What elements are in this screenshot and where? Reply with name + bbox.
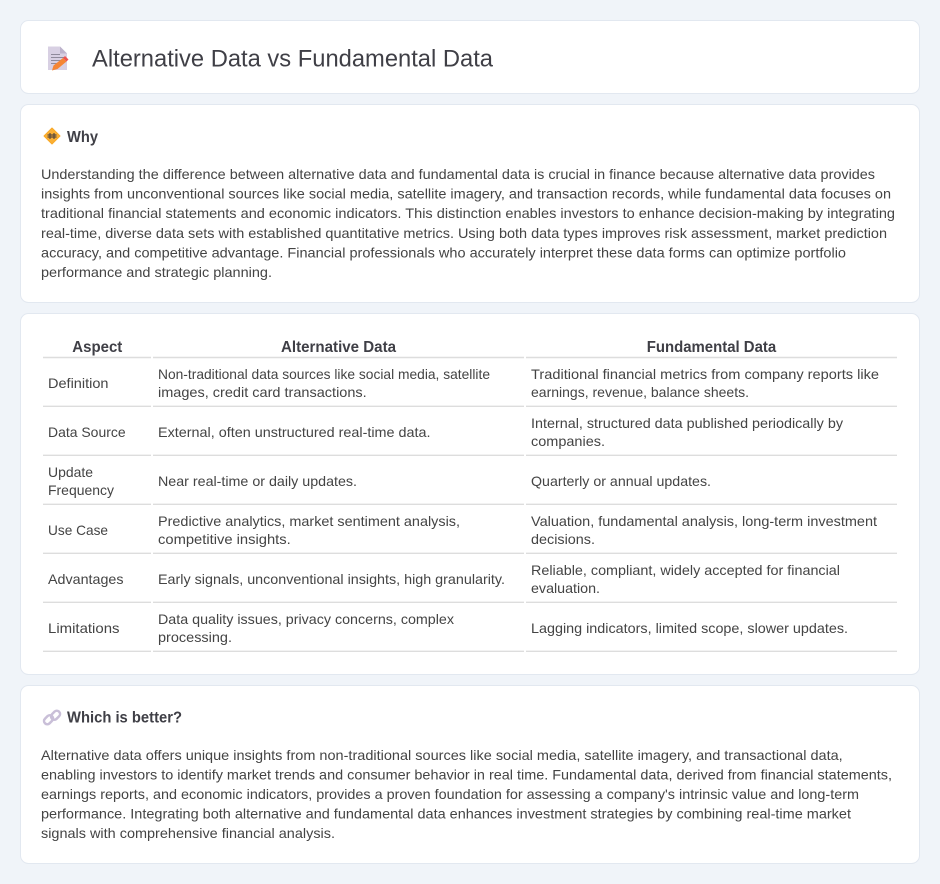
text block: why paragraph: insights from unconventional sources like social media, satellite imagery, and transaction records, while fundamental data focuses on [41,186,891,202]
text block: which is better paragraph: Alternative data offers unique insights from non-traditional sources like social media, satellite imagery, and transactional data, [41,747,843,763]
table row: update frequency: Quarterly or annual updates. [531,473,711,489]
table row: definition: images, credit card transactions. [158,384,367,400]
table row: advantages: Early signals, unconventional insights, high granularity. [158,571,505,587]
table row: use case [48,513,877,547]
table row: advantages: Reliable, compliant, widely accepted for financial [531,562,840,578]
table header row: Fundamental Data [647,339,776,356]
panel: comparison table [20,314,920,674]
table row: update frequency: Frequency [48,482,114,498]
text block: why paragraph [41,166,895,280]
table row: limitations: Limitations [48,620,120,636]
table row: limitations: processing. [158,629,232,645]
table header row: Alternative Data [281,339,396,356]
table header row [72,339,776,356]
table row: use case: Valuation, fundamental analysis, long-term investment [531,513,877,529]
heading: which is better: Which is better? [67,710,182,726]
icon: orange diamond [44,128,60,144]
table row: data source: Internal, structured data published periodically by [531,415,843,431]
table row: advantages: evaluation. [531,580,600,596]
table row: use case: competitive insights. [158,531,291,547]
table row: use case: Use Case [48,522,108,538]
text block: why paragraph: accuracy, and competitive advantage. Financial professionals who accurately interpret these data forms can optimize portfolio [41,244,846,260]
table row: data source: Data Source [48,424,126,440]
table row: limitations: Data quality issues, privacy concerns, complex [158,611,454,627]
table row: use case: decisions. [531,531,595,547]
text block: why paragraph: Understanding the difference between alternative data and fundamental data is crucial in finance because alternative data provides [41,166,875,182]
icon: chain link [43,709,61,726]
text block: why paragraph: traditional financial statements and economic indicators. This distinction enables investors to enhance decision-making by integrating [41,205,895,221]
table row: data source [48,415,843,449]
title: Alternative Data vs Fundamental Data [92,46,494,72]
table row: definition: Traditional financial metrics from company reports like [531,366,879,382]
text block: which is better paragraph [41,747,892,841]
table row: use case: Predictive analytics, market sentiment analysis, [158,513,460,529]
panel: title header [20,20,920,94]
text block: which is better paragraph: enabling investors to identify market trends and consumer behavior in real time. Fundamental data, derived from financial statements, [41,766,892,782]
table row: update frequency: Update [48,464,93,480]
table row: definition: Definition [48,375,108,391]
panel: which is better [20,686,920,864]
table row: data source: External, often unstructured real-time data. [158,424,430,440]
text block: which is better paragraph: earnings reports, and economic indicators, provides a proven foundation for assessing a company's intrinsic value and long-term [41,786,859,802]
text block: which is better paragraph: signals with comprehensive financial analysis. [41,825,335,841]
icon: document with pencil [48,46,68,70]
table header row: Aspect [72,339,123,356]
table row: limitations [48,611,848,645]
table row: advantages: Advantages [48,571,124,587]
table row: definition [48,366,879,400]
text block: why paragraph: real-time, diverse data sets with established quantitative metrics. Using both data types improves risk assessment, market prediction [41,225,887,241]
table row: definition: earnings, revenue, balance sheets. [531,384,749,400]
table row: definition: Non-traditional data sources like social media, satellite [158,366,490,382]
table row: update frequency: Near real-time or daily updates. [158,473,357,489]
text block: why paragraph: performance and strategic planning. [41,264,272,280]
table row: advantages [48,562,840,596]
text block: which is better paragraph: performance. Integrating both alternative and fundamental data enhances investment strategies by combining real-time market [41,806,851,822]
panel: why [20,104,920,302]
table row: update frequency [48,464,711,498]
table row: limitations: Lagging indicators, limited scope, slower updates. [531,620,848,636]
heading: why: Why [67,129,98,146]
table row: data source: companies. [531,433,605,449]
